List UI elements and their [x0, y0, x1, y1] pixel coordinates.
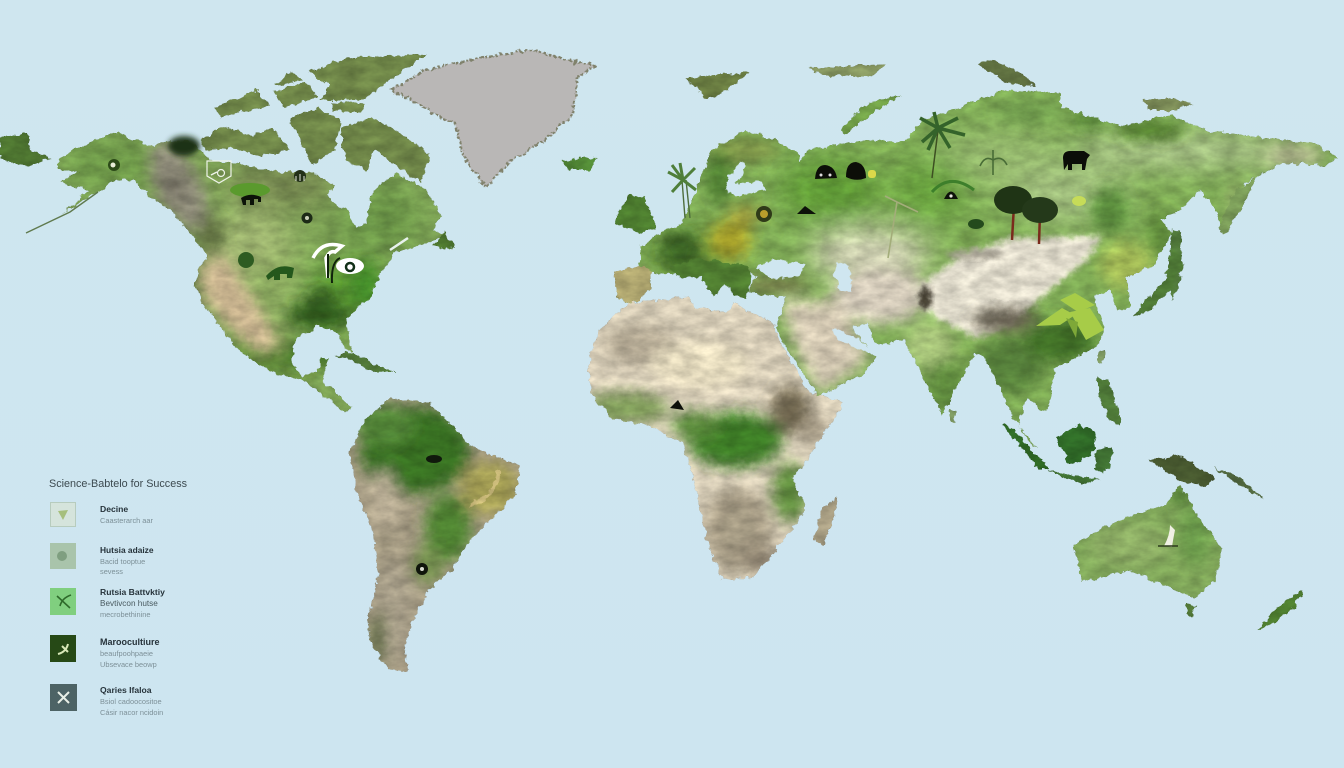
- Iceland: [562, 157, 597, 170]
- Svalbard: [686, 72, 750, 100]
- legend panel: [49, 478, 187, 717]
- legend item: Maroocultiure: Maroocultiure: [100, 637, 160, 647]
- Sumatra: [1002, 424, 1048, 470]
- legend item: Rutsia Battvktiy: Bevtivcon hutse: [100, 599, 158, 608]
- icon: yellow marker: [868, 170, 876, 178]
- icon: black bear, Siberia: [1063, 151, 1090, 170]
- Chukotka fragment: [0, 134, 50, 166]
- Sri Lanka and Taiwan: [950, 350, 1104, 422]
- icon: badge, Amazon: [426, 455, 442, 463]
- icon: badge, West Africa: [670, 400, 684, 410]
- icon: green mound with bear, Canada: [230, 183, 270, 205]
- icon: lime marker: [1072, 196, 1086, 206]
- icon: buffalo, Great Plains: [266, 266, 294, 280]
- Kamchatka and Sakhalin: [1168, 176, 1256, 300]
- legend item: Hutsia adaize: Bacid tooptue: [100, 557, 145, 566]
- icon: animal badge, Hudson: [294, 170, 306, 182]
- icon: twin trees, Altai: [994, 186, 1058, 244]
- Borneo: [1056, 425, 1096, 464]
- Newfoundland: [434, 232, 456, 250]
- legend item: Decline: Decine: [100, 504, 128, 514]
- Africa: [580, 295, 850, 585]
- icon: dome badge, Russia 2: [846, 162, 866, 180]
- legend item: Maroocultiure: Ubsevace beowp: [100, 660, 157, 669]
- legend item: Maroocultiure: [50, 635, 160, 669]
- icon: badge, Alaska: [108, 159, 120, 171]
- icon: palm tree, Urals: [920, 112, 965, 178]
- New Siberian Islands: [1143, 98, 1194, 110]
- icon: white sprout, Australia: [1158, 525, 1178, 547]
- icon: forest, Rockies: [238, 252, 254, 268]
- legend item: Qaries Ifaloa: Qaries Ifaloa: [100, 685, 152, 695]
- icon: sunflower, Europe: [756, 206, 772, 222]
- Australia: [1073, 485, 1222, 598]
- icon: dome badge, Russia 1: [815, 165, 837, 179]
- North America: [57, 131, 448, 413]
- inland seas: [724, 160, 872, 352]
- Cuba and Hispaniola: [335, 351, 395, 372]
- Greenland ice sheet: [392, 50, 597, 188]
- legend item: Rutsia Battvktiy: mecrobethinine: [100, 610, 151, 619]
- Iberia: [614, 266, 652, 304]
- Franz Josef Land: [808, 65, 887, 76]
- Canadian Arctic islands: [202, 54, 430, 182]
- legend item: Maroocultiure: beaufpoohpaeie: [100, 649, 153, 658]
- legend item: Hutsia adaize: sevess: [100, 567, 123, 576]
- Tibetan plateau: [917, 236, 1102, 338]
- icon: triangle, Ukraine: [797, 206, 816, 214]
- legend item: Qaries Ifaloa: Bsiol cadoocositoe: [100, 697, 162, 706]
- South America: [348, 398, 520, 672]
- legend item: Hutsia adaize: [50, 543, 154, 576]
- icon: bright fern, southern China: [1036, 293, 1104, 340]
- icon: dark conifer patch, Yukon: [168, 136, 200, 156]
- icon: rainbow mound with badge, Siberia: [932, 181, 974, 199]
- icon: white hooked swoosh over Great Lakes: [313, 238, 408, 283]
- Philippines: [1097, 378, 1122, 425]
- New Guinea: [1150, 455, 1215, 487]
- icon: animal badge, Manitoba: [302, 212, 312, 224]
- Java and Sulawesi: [1045, 448, 1112, 484]
- Eurasia: [610, 85, 1344, 455]
- icon: dandelion stalk, Kazakhstan: [885, 196, 918, 258]
- icon: palm tree, Scandinavia: [668, 163, 696, 218]
- legend title: Science-Babtelo for Success: [49, 478, 187, 490]
- legend item: Decline: Caasterarch aar: [100, 516, 154, 525]
- legend item: Hutsia adaize: Hutsia adaize: [100, 545, 154, 555]
- legend item: Rutsia Battvktiy: [50, 587, 165, 619]
- Japan: [1132, 250, 1185, 318]
- icon: dark oval: [968, 219, 984, 229]
- legend item: Qaries Ifaloa: Cásir nacor ncidoin: [100, 708, 163, 717]
- icon: shield: [207, 161, 231, 183]
- British Isles: [615, 195, 656, 234]
- New Zealand: [1258, 590, 1302, 630]
- Novaya Zemlya: [840, 96, 900, 134]
- legend item: Decline: [50, 502, 154, 526]
- legend item: Rutsia Battvktiy: Rutsia Battvktiy: [100, 587, 165, 597]
- Aleutian chain: [26, 192, 98, 233]
- icon: seedling, Siberia: [980, 150, 1007, 175]
- legend item: Qaries Ifaloa: [50, 684, 163, 717]
- Italy and Balkans: [668, 258, 752, 298]
- icon: badge, Patagonia: [416, 563, 428, 575]
- Severnaya Zemlya: [978, 60, 1036, 86]
- Madagascar: [813, 497, 838, 545]
